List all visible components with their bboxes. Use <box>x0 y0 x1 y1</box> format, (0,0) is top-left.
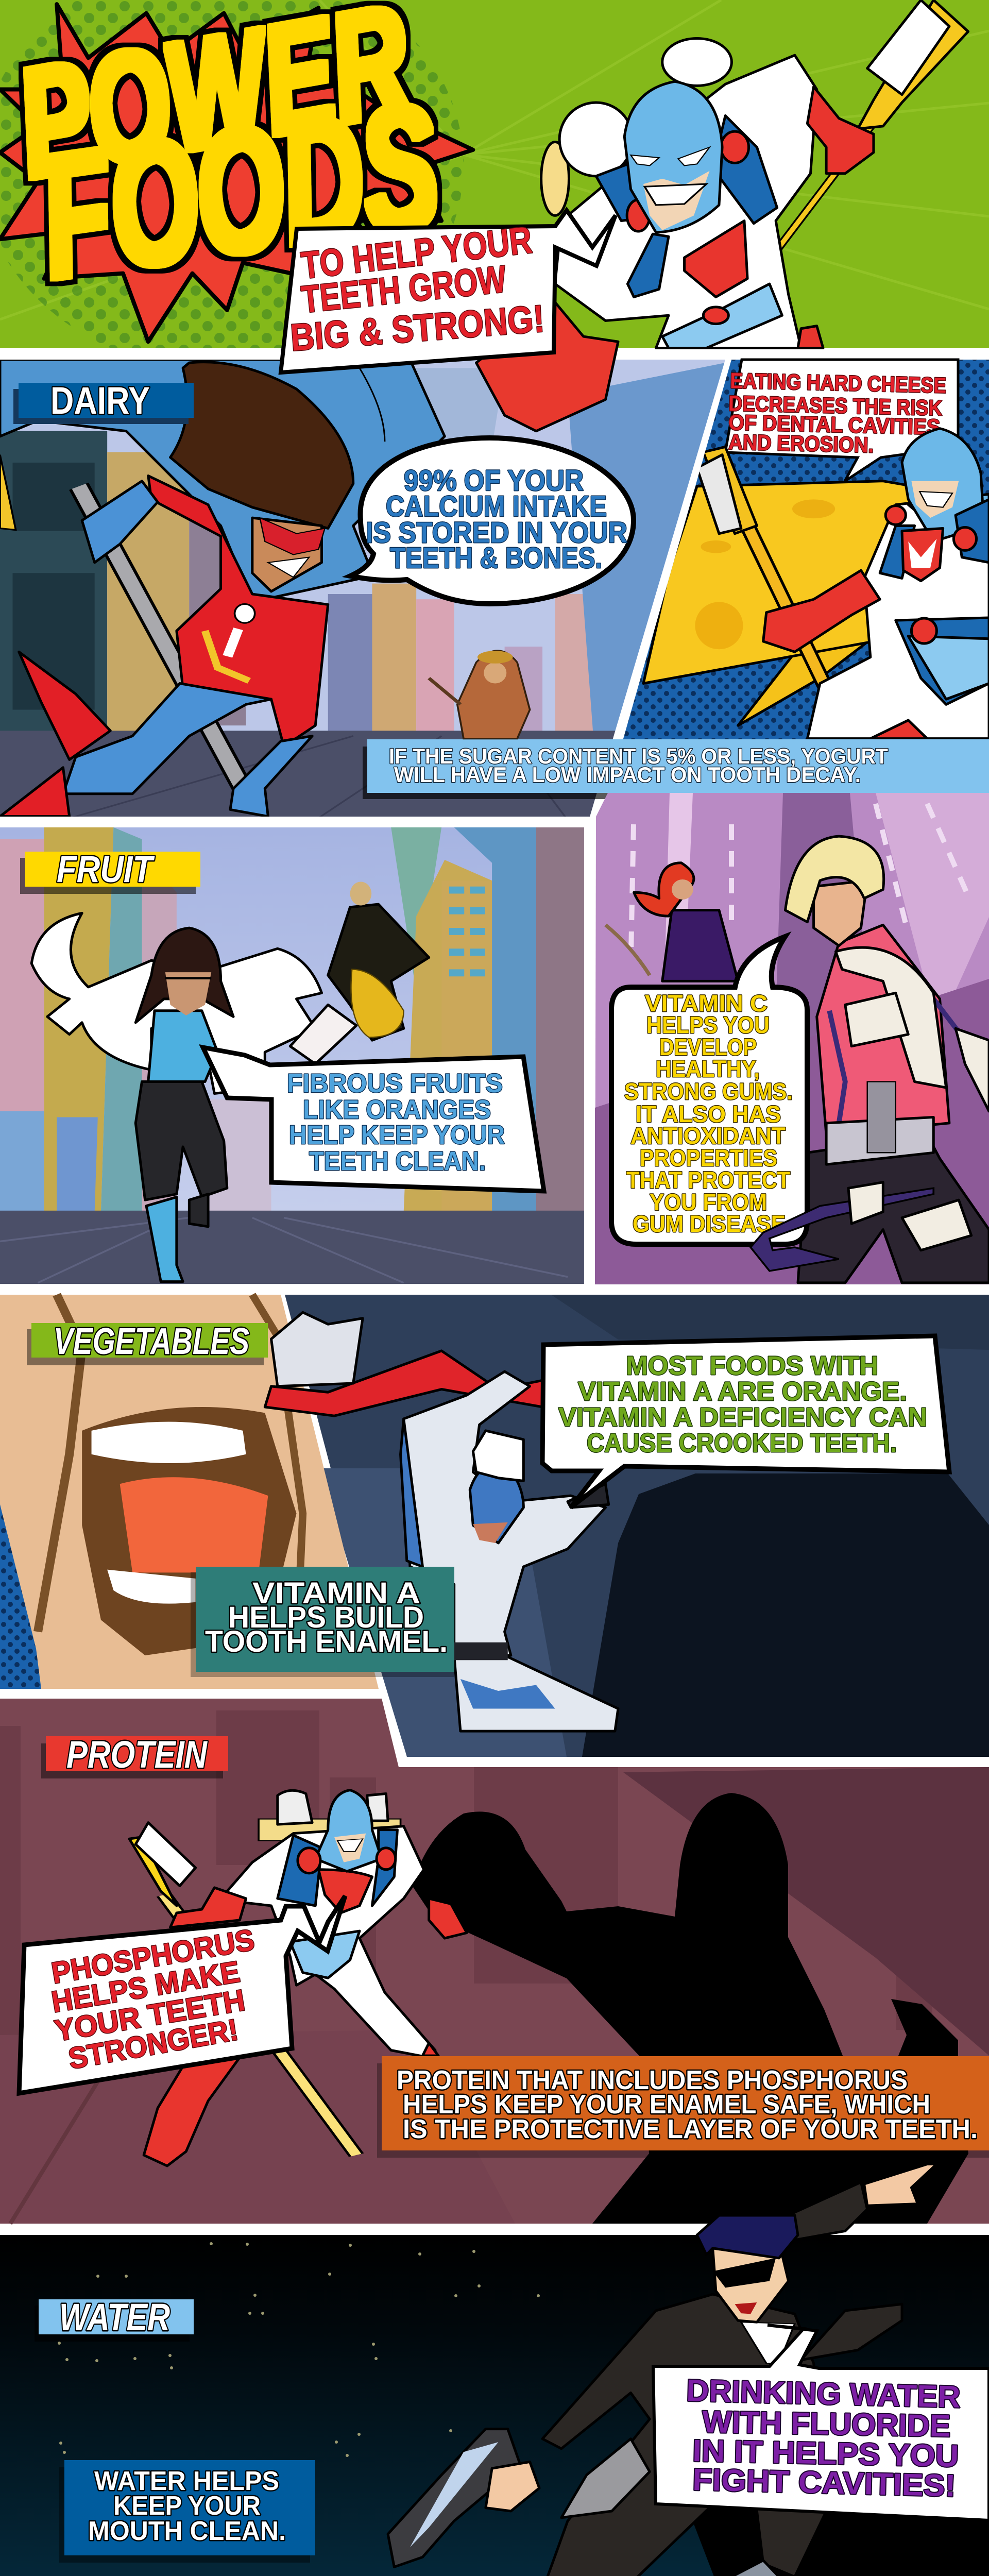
text: vitamin c fact: HELPS YOU <box>646 1012 770 1038</box>
text: water helps fact: KEEP YOUR <box>113 2491 261 2521</box>
text: vitamin a enamel: HELPS BUILD <box>228 1601 424 1634</box>
text: protein fact: PROTEIN THAT INCLUDES PHOSPHORUS <box>397 2065 908 2095</box>
panel: header <box>0 0 989 371</box>
heading: protein: PROTEIN <box>66 1733 208 1776</box>
silhouette: looming monster <box>412 1793 968 2224</box>
text: fluoride fact: DRINKING WATER <box>686 2373 961 2414</box>
heading: dairy: DAIRY <box>50 379 150 422</box>
text: vitamin a fact <box>558 1351 927 1458</box>
bubble: fluoride <box>653 2325 989 2520</box>
bubble: calcium fact <box>350 438 634 604</box>
title burst <box>0 4 473 342</box>
gold toothbrush <box>129 1823 356 2155</box>
character: archer <box>606 863 738 981</box>
panel: open mouth close-up <box>0 1295 379 1689</box>
text: phosphorus fact: PHOSPHORUS <box>49 1923 257 1990</box>
text: protein fact: IS THE PROTECTIVE LAYER OF YOUR TEETH. <box>403 2114 978 2144</box>
text: vitamin c fact: IT ALSO HAS <box>636 1101 781 1127</box>
ray gun <box>388 2429 539 2567</box>
text: fluoride fact <box>686 2373 961 2503</box>
title: power foods: FOODS <box>29 66 450 315</box>
text: calcium fact: CALCIUM INTAKE <box>386 490 607 523</box>
text: vitamin c fact: YOU FROM <box>650 1189 767 1215</box>
text: yogurt fact: IF THE SUGAR CONTENT IS 5% OR LESS, YOGURT <box>389 744 888 768</box>
text: eating hard cheese: OF DENTAL CAVITIES <box>728 410 941 439</box>
text: to help your teeth grow big and strong: TEETH GROW <box>299 257 508 321</box>
text: phosphorus fact: HELPS MAKE <box>49 1955 242 2019</box>
clipboard <box>290 1005 356 1064</box>
text: vitamin a enamel: TOOTH ENAMEL. <box>205 1625 448 1658</box>
staff <box>79 486 243 789</box>
text: calcium fact: IS STORED IN YOUR <box>366 516 627 549</box>
text: vitamin c fact: ANTIOXIDANT <box>630 1123 786 1149</box>
character: protein hero <box>129 1790 467 2166</box>
text: phosphorus fact: STRONGER! <box>66 2013 241 2076</box>
heading: fruit: FRUIT <box>57 849 155 890</box>
callout: yogurt strip <box>363 739 989 799</box>
character: vegetables hero with toothbrush <box>265 1312 618 1731</box>
floating villain <box>328 882 429 1040</box>
text: vitamin c fact: DEVELOP <box>659 1034 757 1060</box>
text: protein fact: HELPS KEEP YOUR ENAMEL SAFE, WHICH <box>403 2090 930 2120</box>
text: fluoride fact: WITH FLUORIDE <box>702 2404 951 2443</box>
text: fibrous fruits fact: FIBROUS FRUITS <box>287 1069 503 1098</box>
silhouette: shadow figure <box>582 1473 989 1757</box>
toothbrush <box>697 447 826 689</box>
callout: water helps <box>59 2460 315 2563</box>
text: eating hard cheese: AND EROSION. <box>728 430 874 457</box>
text: vitamin a fact: CAUSE CROOKED TEETH. <box>587 1428 897 1458</box>
heading: dairy <box>13 379 194 424</box>
panel: cheese hero <box>623 360 989 739</box>
text: calcium fact: TEETH & BONES. <box>390 541 602 574</box>
text: phosphorus fact: YOUR TEETH <box>53 1984 247 2048</box>
panel: dairy city scene <box>0 360 725 820</box>
character: silver-haired heroine <box>786 836 989 1283</box>
text: vitamin a enamel <box>205 1577 448 1658</box>
text: vitamin c fact: PROPERTIES <box>640 1145 777 1171</box>
callout: protein enamel <box>377 2056 989 2158</box>
title: power foods <box>6 0 450 315</box>
text: vitamin c fact: HEALTHY, <box>656 1056 760 1082</box>
lab coat <box>31 913 321 1094</box>
text: yogurt fact <box>389 744 888 787</box>
bubble: title subtitle <box>281 210 616 372</box>
text: fibrous fruits fact: TEETH CLEAN. <box>309 1146 486 1176</box>
text: calcium fact <box>366 464 627 574</box>
cape <box>0 360 445 602</box>
text: eating hard cheese: DECREASES THE RISK <box>728 391 943 420</box>
text: fibrous fruits fact: LIKE ORANGES <box>303 1095 491 1124</box>
jetpack tanks <box>541 38 731 215</box>
text: vitamin a enamel: VITAMIN A <box>252 1577 420 1610</box>
text: eating hard cheese <box>728 368 947 457</box>
text: fibrous fruits fact <box>287 1069 505 1176</box>
text: water helps fact: WATER HELPS <box>94 2466 279 2496</box>
toothbrush <box>763 0 968 268</box>
character: distant villain <box>429 651 530 739</box>
red toothbrush <box>265 1312 542 1416</box>
text: vitamin c fact: THAT PROTECT <box>626 1167 790 1193</box>
text: vitamin a fact: VITAMIN A DEFICIENCY CAN <box>558 1402 927 1432</box>
text: yogurt fact: WILL HAVE A LOW IMPACT ON TOOTH DECAY. <box>394 762 861 787</box>
character: dairy heroine <box>0 360 445 817</box>
text: vitamin c fact <box>624 990 793 1237</box>
character: header hero <box>476 0 968 431</box>
text: vitamin a fact: VITAMIN A ARE ORANGE. <box>578 1377 907 1406</box>
callout: tooth enamel <box>191 1567 454 1677</box>
heading: fruit <box>20 849 200 894</box>
bubble: vitamin c <box>611 937 807 1244</box>
text: vitamin c fact: VITAMIN C <box>645 990 768 1016</box>
hair <box>170 362 353 529</box>
jet tanks <box>259 1790 401 1841</box>
character: agent <box>388 2164 936 2576</box>
text: calcium fact: 99% OF YOUR <box>404 464 584 497</box>
text: water helps fact: MOUTH CLEAN. <box>88 2516 286 2546</box>
bubble: vitamin a orange <box>542 1336 949 1507</box>
text: fibrous fruits fact: HELP KEEP YOUR <box>289 1120 505 1149</box>
text: vitamin c fact: GUM DISEASE <box>633 1211 786 1237</box>
icon: cheese wedge <box>642 480 909 727</box>
panel: protein scene <box>0 1699 989 2224</box>
buildings silhouette <box>0 2504 989 2576</box>
text: to help your teeth grow big and strong <box>289 218 546 359</box>
text: vitamin c fact: STRONG GUMS. <box>624 1078 793 1105</box>
bubble: phosphorus <box>19 1896 345 2093</box>
heading: water: WATER <box>59 2296 170 2338</box>
text: fluoride fact: IN IT HELPS YOU <box>692 2433 959 2473</box>
character: cheese panel hero <box>697 429 989 739</box>
text: phosphorus fact <box>49 1923 257 2076</box>
panel: water night scene <box>0 2235 989 2576</box>
text: to help your teeth grow big and strong: TO HELP YOUR <box>299 218 534 287</box>
panel: fruit city <box>0 827 584 1284</box>
text: eating hard cheese: EATING HARD CHEESE <box>730 368 947 398</box>
red arm and fist <box>476 87 874 431</box>
text: fluoride fact: FIGHT CAVITIES! <box>692 2462 956 2503</box>
text: water helps fact <box>88 2466 286 2546</box>
text: protein fact <box>397 2065 978 2144</box>
text: to help your teeth grow big and strong: BIG & STRONG! <box>289 297 546 359</box>
panel: purple vitamin c scene <box>595 793 989 1284</box>
heading: vegetables: VEGETABLES <box>54 1321 249 1362</box>
panel: vegetables right scene <box>285 1295 989 1757</box>
text: vitamin a fact: MOST FOODS WITH <box>626 1351 878 1380</box>
bubble: cheese fact <box>725 360 958 481</box>
bubble: fibrous fruits <box>203 1047 544 1191</box>
icon: floss pick <box>751 1182 933 1271</box>
character: fruit heroine <box>31 882 429 1282</box>
